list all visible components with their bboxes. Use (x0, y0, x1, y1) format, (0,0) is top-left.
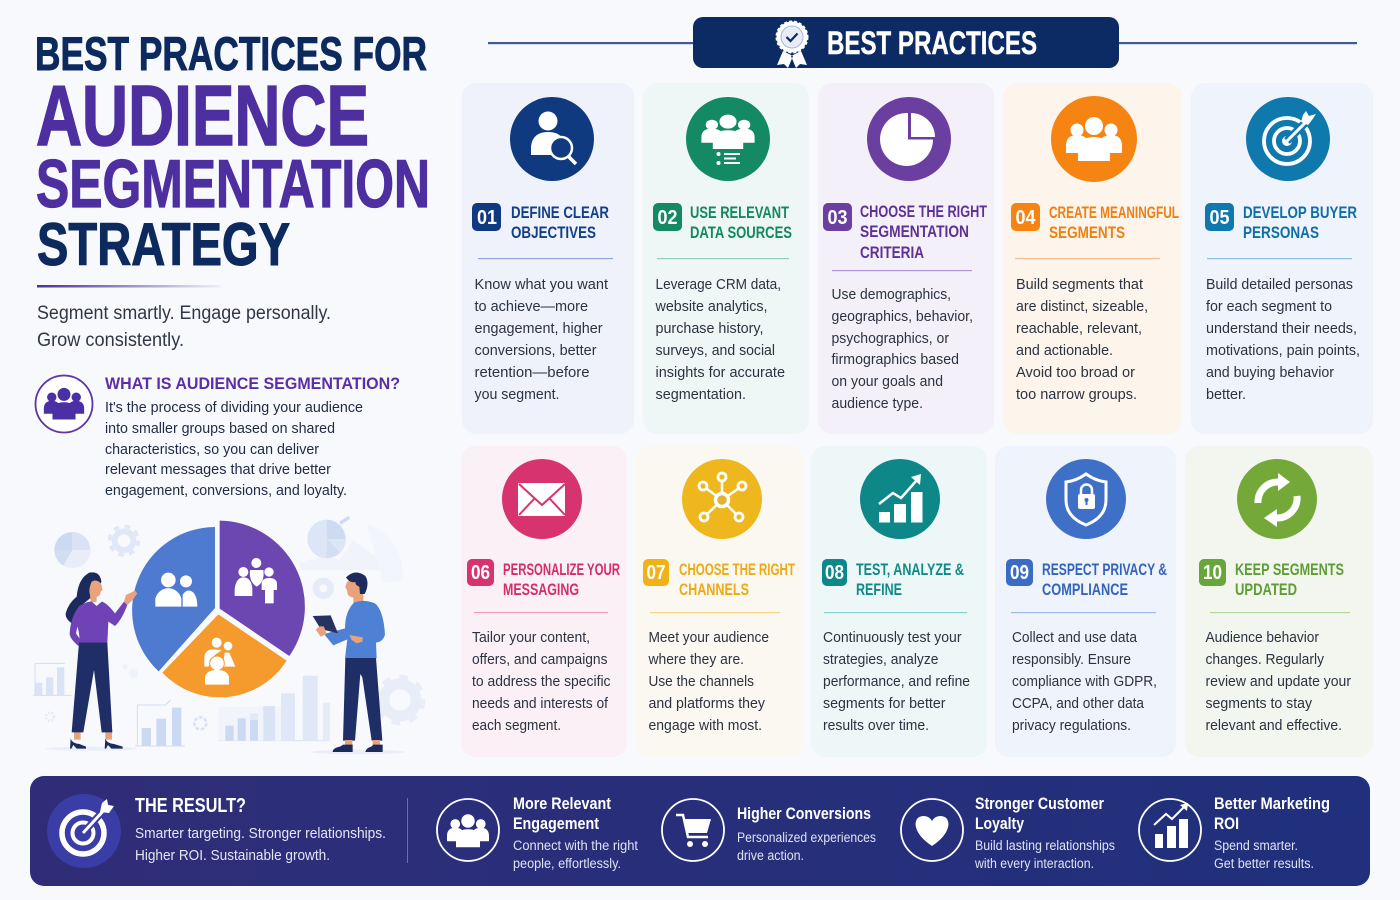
body text: conversions, better (474, 342, 597, 359)
heading (503, 560, 620, 599)
header: best practices banner: BEST PRACTICES (827, 25, 1037, 61)
background charts and gears (33, 517, 423, 746)
heading: RESPECT PRIVACY & (1042, 560, 1167, 579)
heading: PERSONAS (1243, 223, 1319, 242)
icon: result target (47, 794, 121, 868)
badge 08: 08 (825, 562, 844, 584)
heading: MESSAGING (503, 580, 579, 599)
heading (690, 203, 792, 242)
badge 04 (1011, 203, 1040, 231)
heading: DATA SOURCES (690, 223, 792, 242)
body text: psychographics, or (832, 330, 949, 347)
icon: pie chart (867, 97, 951, 181)
result text: THE RESULT? (135, 795, 246, 817)
badge 03: 03 (828, 207, 848, 229)
heading: CHOOSE THE RIGHT (679, 560, 795, 579)
body text: each segment. (472, 717, 561, 734)
benefit: more relevant engagement: people, effortlessly. (513, 856, 621, 871)
body text (832, 286, 973, 412)
title (35, 27, 430, 278)
panel: 02 use relevant data sources (643, 83, 809, 434)
body text: Meet your audience (648, 629, 769, 646)
badge 07 (643, 559, 669, 586)
benefit: stronger customer loyalty: Loyalty (975, 815, 1025, 833)
icon: people with data list (686, 97, 770, 181)
badge 05 (1205, 203, 1234, 231)
body text: privacy regulations. (1012, 717, 1131, 734)
body text: for each segment to (1206, 298, 1332, 315)
body text: understand their needs, (1206, 320, 1357, 337)
badge 09: 09 (1010, 562, 1029, 584)
body text: too narrow groups. (1016, 386, 1137, 403)
body text: retention—before (474, 364, 590, 381)
body text: Use the channels (648, 673, 754, 690)
figure: man (312, 572, 405, 754)
badge 02 (653, 203, 682, 231)
heading: USE RELEVANT (690, 203, 789, 222)
pie segment: purple (220, 521, 305, 656)
body text: engage with most. (648, 717, 762, 734)
subtitle: Segment smartly. Engage personally. (37, 303, 331, 324)
icon: audience group (36, 376, 92, 432)
heading: DEFINE CLEAR (511, 203, 609, 222)
heading (1042, 560, 1167, 599)
body text: geographics, behavior, (832, 308, 973, 325)
body text: Use demographics, (832, 286, 951, 303)
subtitle: Grow consistently. (37, 330, 184, 351)
icon: award ribbon (776, 22, 808, 68)
heading: COMPLIANCE (1042, 580, 1128, 599)
badge 04: 04 (1016, 207, 1036, 229)
body text: firmographics based (832, 351, 959, 368)
body text (1206, 276, 1360, 403)
body text: Know what you want (474, 276, 609, 293)
definition text: It's the process of dividing your audience (105, 400, 363, 416)
badge 10 (1199, 559, 1226, 586)
heading: TEST, ANALYZE & (856, 560, 964, 579)
body text: responsibly. Ensure (1012, 651, 1131, 668)
body text: insights for accurate (656, 364, 785, 381)
icon: rising bar chart (860, 459, 940, 539)
body text: engagement, higher (474, 320, 602, 337)
panel: 05 develop buyer personas (1191, 83, 1373, 434)
heading: CREATE MEANINGFUL (1049, 203, 1179, 222)
title: AUDIENCE (36, 69, 369, 164)
body text: strategies, analyze (823, 651, 938, 668)
body text: segments to stay (1206, 695, 1312, 712)
body text: purchase history, (656, 320, 764, 337)
panel: 08 test, analyze and refine (811, 446, 987, 757)
pie segment: orange (162, 614, 287, 697)
body text: website analytics, (655, 298, 768, 315)
benefit: stronger customer loyalty: with every interaction. (974, 856, 1094, 871)
benefit: stronger customer loyalty (901, 795, 1115, 871)
badge 09 (1006, 559, 1033, 586)
body text: audience type. (832, 395, 923, 412)
body text: Audience behavior (1206, 629, 1319, 646)
body text: better. (1206, 386, 1246, 403)
icon: group of people (1051, 96, 1137, 182)
title underline (37, 285, 220, 288)
heading (679, 560, 795, 599)
title: SEGMENTATION (36, 146, 430, 222)
body text: changes. Regularly (1206, 651, 1324, 668)
body text: surveys, and social (656, 342, 775, 359)
body text: Tailor your content, (472, 629, 590, 646)
body text: needs and interests of (472, 695, 609, 712)
body text (1016, 276, 1148, 403)
benefit: higher conversions: Personalized experiences (737, 830, 876, 845)
heading: CRITERIA (860, 243, 924, 262)
figure: woman (45, 572, 138, 751)
icon: envelope (502, 459, 582, 539)
icon: shield with lock (1046, 459, 1126, 539)
heading: DEVELOP BUYER (1243, 203, 1357, 222)
heading (511, 203, 609, 242)
body text: Build detailed personas (1206, 276, 1353, 293)
result text: Smarter targeting. Stronger relationships. (135, 825, 386, 842)
body text (1012, 629, 1157, 734)
body text: offers, and campaigns (472, 651, 608, 668)
badge 06 (467, 559, 494, 586)
body text: segmentation. (656, 386, 746, 403)
illustration: people with segmented pie chart (33, 517, 423, 754)
body text: motivations, pain points, (1206, 342, 1360, 359)
heading: OBJECTIVES (511, 223, 596, 242)
body text: where they are. (648, 651, 744, 668)
body text: Avoid too broad or (1016, 364, 1135, 381)
definition text (105, 400, 363, 499)
panel: 06 personalize your messaging (461, 446, 627, 757)
panel: 10 keep segments updated (1185, 446, 1373, 757)
heading: REFINE (856, 580, 902, 599)
header: best practices banner (488, 17, 1357, 68)
body text (474, 276, 609, 403)
body text: and buying behavior (1206, 364, 1334, 381)
body text: to achieve—more (474, 298, 588, 315)
body text: segments for better (823, 695, 946, 712)
badge 02: 02 (658, 207, 678, 229)
panel: 03 choose the right segmentation criteria (818, 83, 994, 434)
benefit: stronger customer loyalty: Stronger Customer (975, 795, 1104, 813)
body text (648, 629, 769, 734)
badge 05: 05 (1210, 207, 1230, 229)
definition text: into smaller groups based on shared (105, 421, 335, 437)
heading: SEGMENTATION (860, 222, 969, 241)
definition text: engagement, conversions, and loyalty. (105, 483, 347, 499)
body text (655, 276, 785, 403)
definition text: relevant messages that drive better (105, 462, 331, 478)
heading (1049, 203, 1179, 242)
benefit: better marketing roi: ROI (1214, 815, 1239, 833)
benefit: more relevant engagement: Engagement (513, 815, 599, 833)
heading (860, 202, 987, 262)
body text: reachable, relevant, (1016, 320, 1142, 337)
benefit: higher conversions: drive action. (737, 848, 804, 863)
icon: refresh arrows (1237, 459, 1317, 539)
body text (472, 629, 611, 734)
badge 06: 06 (471, 562, 490, 584)
heading: CHOOSE THE RIGHT (860, 202, 987, 221)
icon: person with magnifier (510, 97, 594, 181)
heading (1243, 203, 1357, 242)
body text: results over time. (823, 717, 929, 734)
body text: Build segments that (1016, 276, 1144, 293)
body text: Continuously test your (823, 629, 962, 646)
body text: on your goals and (832, 373, 943, 390)
body text: and actionable. (1016, 342, 1113, 359)
body text: to address the specific (472, 673, 611, 690)
subtitle (37, 303, 331, 351)
heading: what is audience segmentation: WHAT IS AUDIENCE SEGMENTATION? (105, 374, 400, 393)
body text: relevant and effective. (1206, 717, 1342, 734)
benefit: more relevant engagement: More Relevant (513, 795, 611, 813)
body text: compliance with GDPR, (1012, 673, 1157, 690)
heading: PERSONALIZE YOUR (503, 560, 620, 579)
body text: and platforms they (648, 695, 765, 712)
benefit: better marketing roi: Get better results. (1214, 856, 1314, 871)
badge 01: 01 (477, 207, 497, 229)
heading: UPDATED (1235, 580, 1297, 599)
body text: you segment. (474, 386, 560, 403)
result text (135, 795, 386, 864)
benefit: more relevant engagement: Connect with the right (513, 838, 638, 853)
benefit: better marketing roi: Better Marketing (1214, 795, 1330, 813)
heading (856, 560, 964, 599)
benefit: stronger customer loyalty: Build lasting relationships (975, 838, 1115, 853)
body text: Collect and use data (1012, 629, 1138, 646)
body text: review and update your (1206, 673, 1351, 690)
body text: CCPA, and other data (1012, 695, 1145, 712)
heading: KEEP SEGMENTS (1235, 560, 1344, 579)
definition text: characteristics, so you can deliver (105, 442, 319, 458)
badge 07: 07 (646, 562, 666, 584)
body text: are distinct, sizeable, (1016, 298, 1148, 315)
panel: 04 create meaningful segments (1003, 83, 1182, 434)
heading (1235, 560, 1344, 599)
panel: 07 choose the right channels (636, 446, 803, 757)
panel: the result footer (30, 776, 1370, 886)
body text (823, 629, 970, 734)
benefit: higher conversions (662, 799, 876, 863)
panel: 01 define clear objectives (462, 83, 634, 434)
benefit: higher conversions: Higher Conversions (737, 805, 871, 823)
benefit: better marketing roi (1139, 795, 1330, 871)
body text (1206, 629, 1351, 734)
panel: 09 respect privacy and compliance (995, 446, 1176, 757)
result text: Higher ROI. Sustainable growth. (135, 847, 330, 864)
icon: channel network (682, 459, 762, 539)
heading: CHANNELS (679, 580, 749, 599)
heading: SEGMENTS (1049, 223, 1125, 242)
badge 01 (472, 203, 501, 231)
body text: performance, and refine (823, 673, 970, 690)
icon: target with arrow (1246, 97, 1330, 181)
pie segment: blue (132, 527, 215, 671)
badge 03 (823, 203, 852, 231)
title: STRATEGY (37, 211, 290, 278)
body text: Leverage CRM data, (656, 276, 781, 293)
title: BEST PRACTICES FOR (35, 27, 427, 80)
badge 10: 10 (1203, 562, 1222, 584)
benefit: more relevant engagement (437, 795, 638, 871)
benefit: better marketing roi: Spend smarter. (1214, 838, 1298, 853)
